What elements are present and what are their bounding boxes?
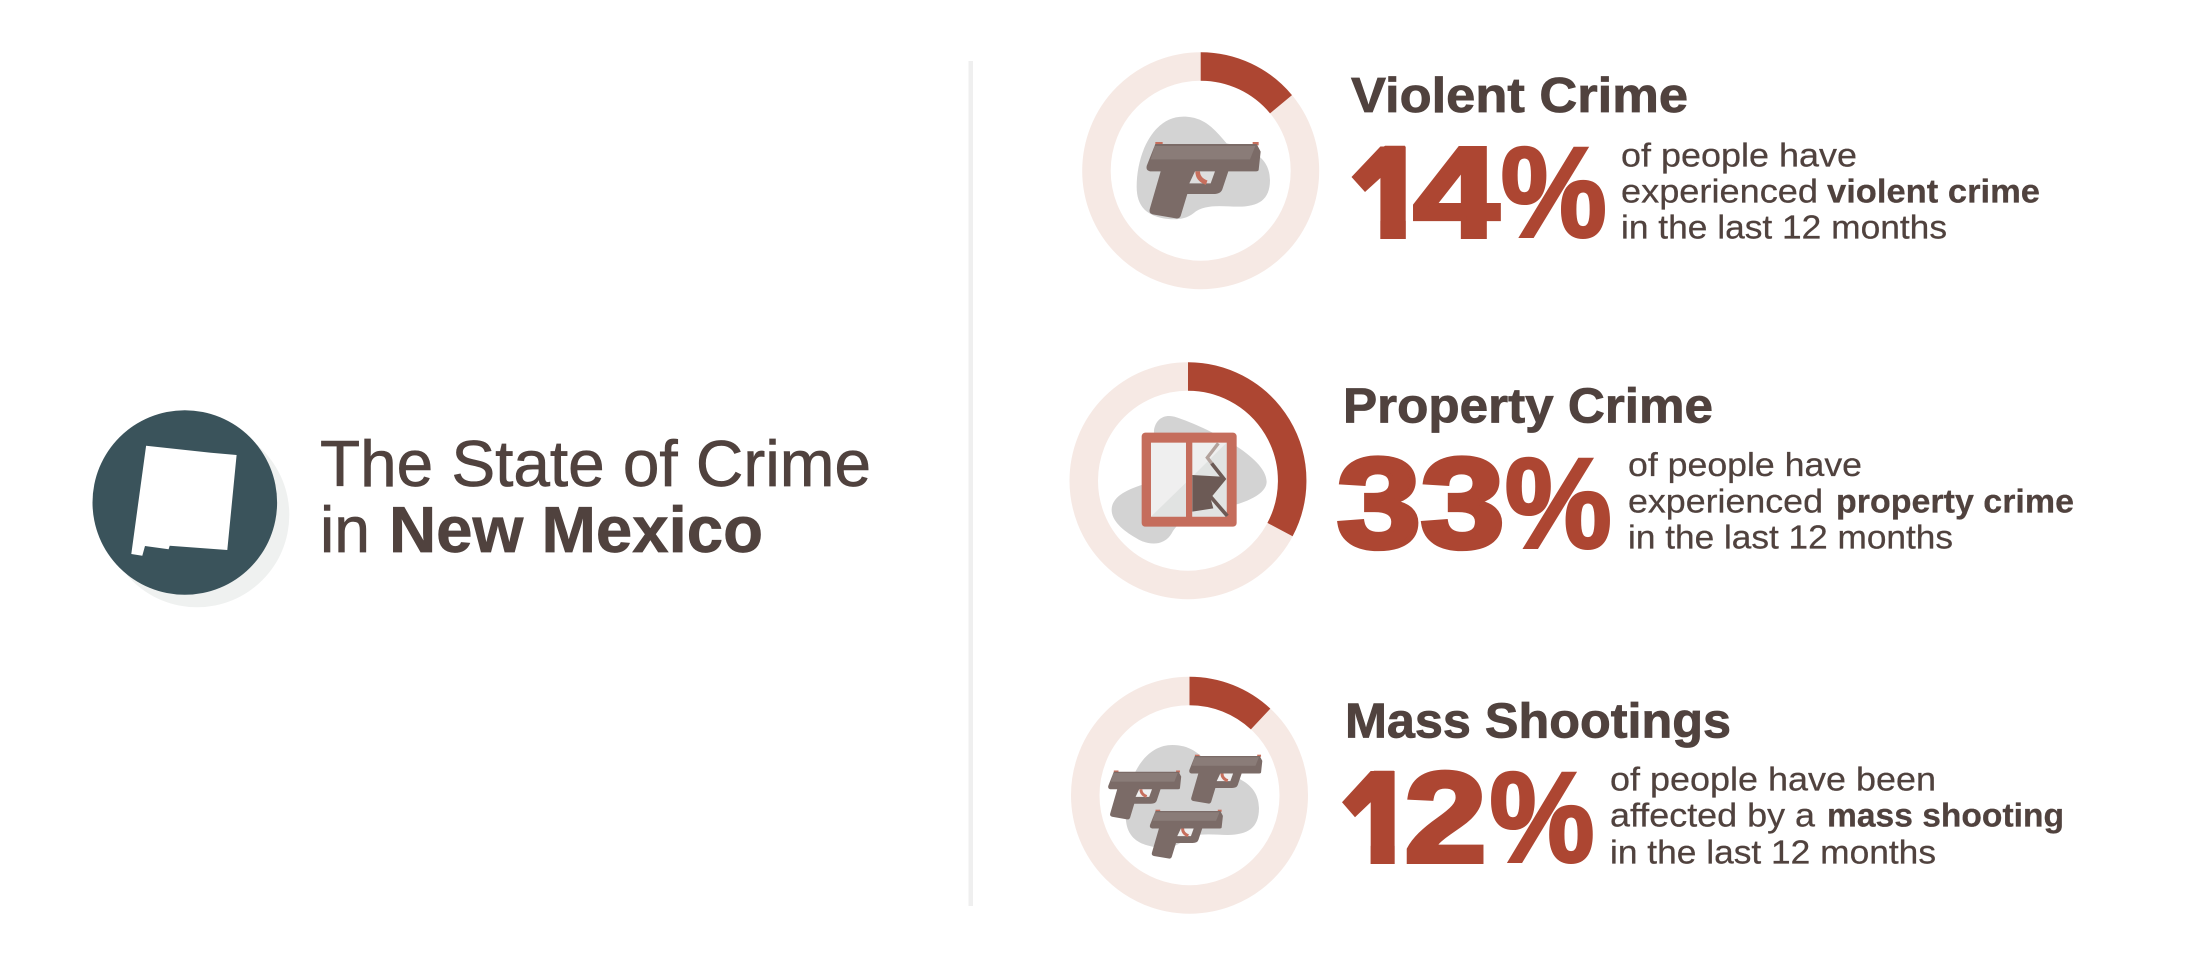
description: experienced: [1621, 173, 1818, 210]
description: property crime: [1836, 482, 2074, 519]
description: mass shooting: [1827, 797, 2064, 834]
title: [320, 427, 871, 566]
statistic: 12%: %: [1490, 746, 1594, 890]
description: experienced: [1628, 482, 1823, 519]
description: in the last 12 months: [1628, 519, 1953, 556]
panel: mass shootings: [1085, 691, 2064, 899]
title: The State of Crime: [320, 427, 871, 500]
heading: Property Crime: [1343, 379, 1713, 433]
heading: Violent Crime: [1351, 69, 1688, 123]
icon: handgun: [1137, 117, 1270, 219]
statistic: 33%: 3: [1337, 432, 1421, 575]
statistic: 33%: [1337, 432, 1612, 576]
statistic: 14%: %: [1501, 122, 1607, 264]
description: violent crime: [1827, 173, 2040, 210]
statistic: 33%: 3: [1421, 432, 1505, 575]
description: [1621, 137, 2040, 246]
statistic: 14%: 1: [1355, 122, 1426, 264]
icon: New Mexico state badge: [92, 410, 289, 607]
description: [1628, 446, 2074, 556]
icon: broken window: [1112, 416, 1267, 544]
panel: violent crime: [1096, 66, 2040, 275]
description: in the last 12 months: [1621, 209, 1947, 246]
title: in: [320, 493, 370, 566]
description: of people have: [1621, 137, 1857, 174]
description: affected by a: [1610, 797, 1816, 834]
statistic: 12%: [1330, 746, 1594, 890]
statistic: 12%: 2: [1404, 746, 1486, 890]
description: in the last 12 months: [1610, 834, 1936, 871]
heading: Mass Shootings: [1345, 694, 1731, 748]
panel: property crime: [1084, 376, 2074, 585]
statistic: 12%: 1: [1344, 746, 1415, 890]
description: of people have: [1628, 446, 1862, 483]
icon: three handguns: [1108, 745, 1262, 859]
statistic: 33%: %: [1505, 432, 1612, 576]
donut chart: 12%: [1085, 691, 1294, 899]
statistic: 14%: 4: [1414, 122, 1499, 264]
description: of people have been: [1610, 760, 1936, 797]
donut chart: 14%: [1096, 66, 1305, 275]
statistic: 14%: [1340, 122, 1607, 264]
title: New Mexico: [389, 493, 763, 566]
description: [1610, 760, 2064, 871]
donut chart: 33%: [1084, 376, 1292, 585]
